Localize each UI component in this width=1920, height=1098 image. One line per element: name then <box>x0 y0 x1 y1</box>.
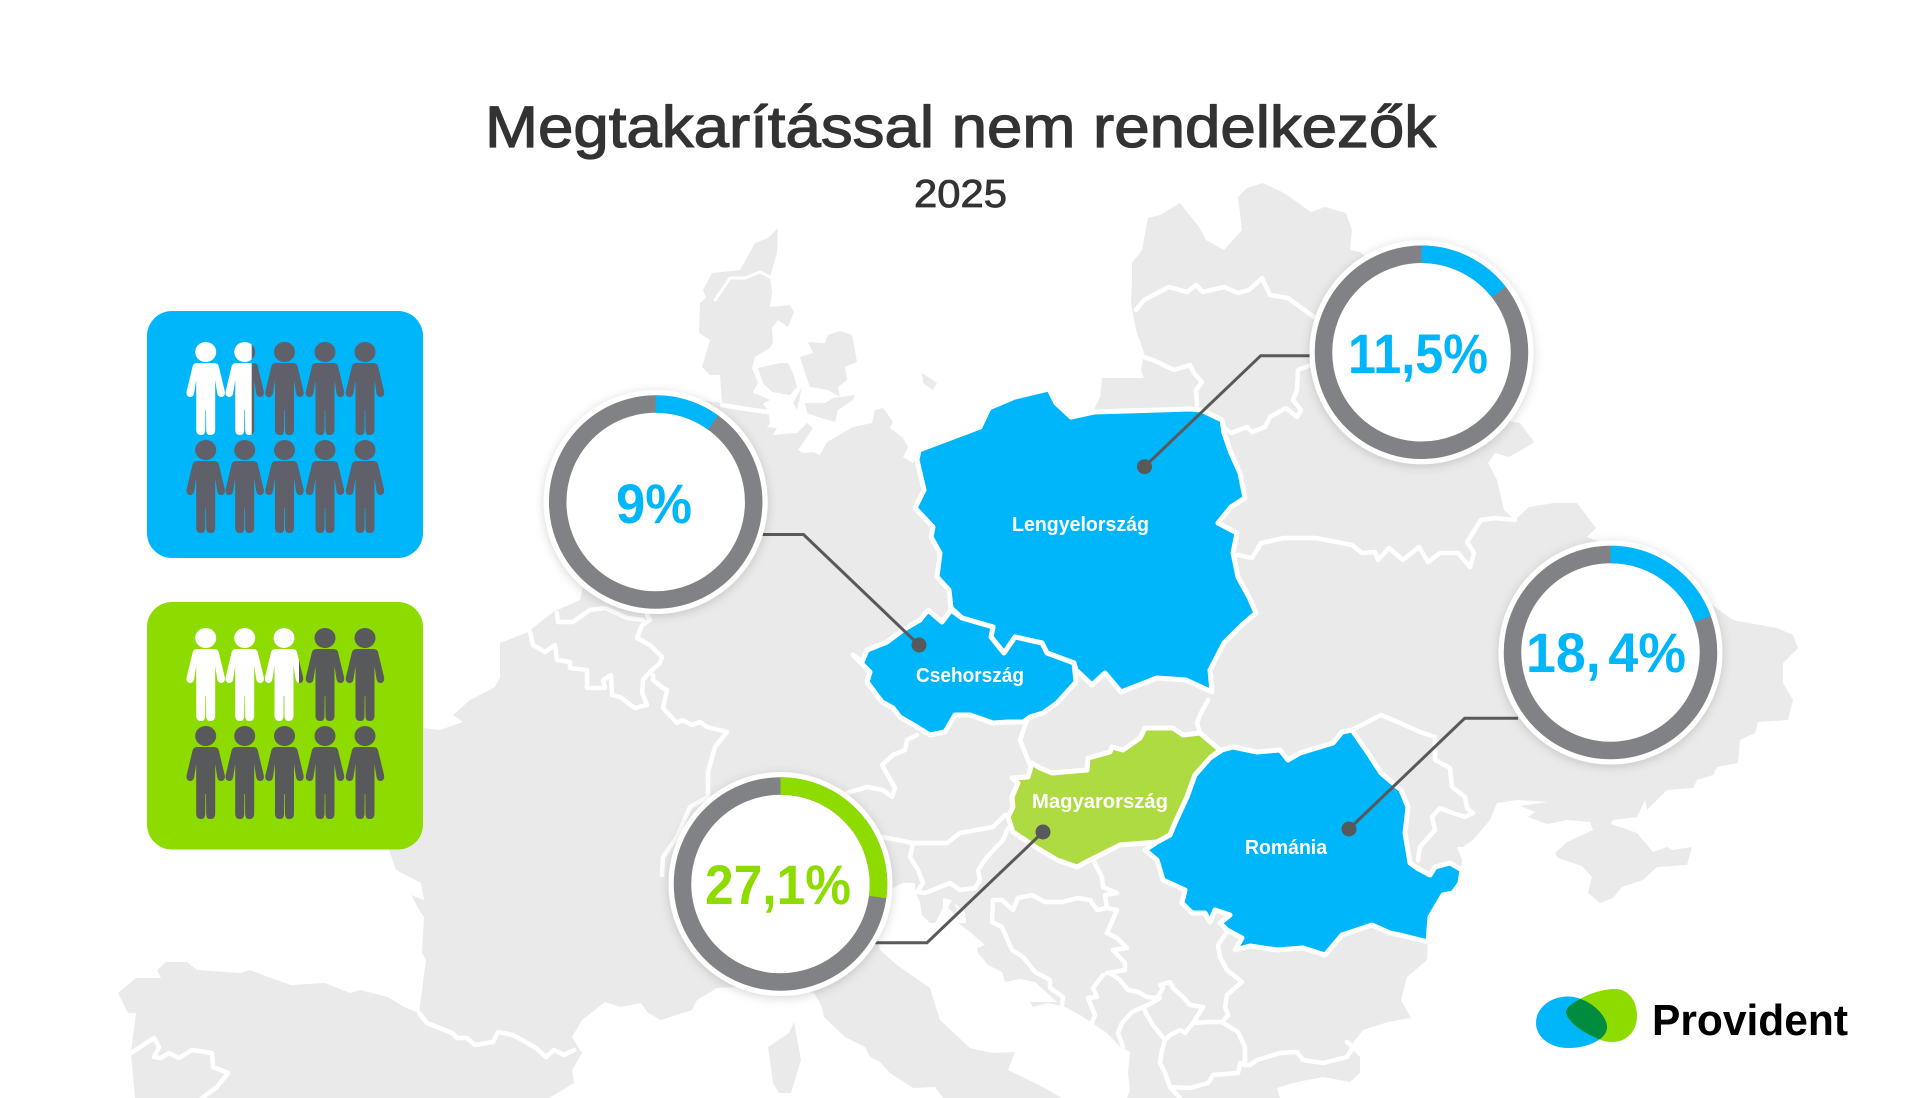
value: 18,4% <box>1526 621 1686 684</box>
country: Hungary <box>1008 728 1220 867</box>
value: 11,5% <box>1348 322 1488 385</box>
label: Hungary: Magyarország <box>1032 791 1168 813</box>
panel: blue people pictogram <box>147 311 423 558</box>
logo: Provident <box>1536 989 1848 1048</box>
donut: Poland 11,5% <box>1310 240 1534 464</box>
logo mark <box>1536 989 1637 1048</box>
icon: people row two <box>186 726 384 819</box>
title: Megtakarítással nem rendelkezők <box>485 95 1437 160</box>
leader line: Romania <box>1342 718 1518 836</box>
map of Europe <box>118 183 1798 1098</box>
leader line: Hungary <box>875 824 1050 943</box>
donut: Romania 18,4% <box>1498 540 1722 764</box>
country borders <box>131 272 1515 1098</box>
icon: partly filled person <box>226 342 252 435</box>
label: Czechia: Csehország <box>916 665 1024 687</box>
icon: people row two <box>186 440 384 533</box>
label: Poland: Lengyelország <box>1012 514 1149 536</box>
leader line: Czechia <box>762 534 926 652</box>
icon: people row one <box>186 628 384 721</box>
country labels <box>916 514 1328 859</box>
icon: partly filled person <box>264 628 299 721</box>
value: 9% <box>616 472 692 535</box>
logo wordmark: Provident <box>1652 996 1848 1045</box>
country: Poland <box>915 389 1256 692</box>
donut: Czechia 9% <box>544 390 768 614</box>
leader line: Poland <box>1137 356 1315 474</box>
donut: Hungary 27,1% <box>668 772 892 996</box>
value: 27,1% <box>705 853 851 916</box>
land mass <box>118 183 1798 1098</box>
subtitle year: 2025 <box>914 173 1007 216</box>
country: Romania <box>1145 730 1462 955</box>
country: Czechia <box>853 610 1076 735</box>
icon: people row one <box>186 342 384 435</box>
panel: green people pictogram <box>147 602 423 850</box>
label: Romania: Románia <box>1245 837 1328 859</box>
